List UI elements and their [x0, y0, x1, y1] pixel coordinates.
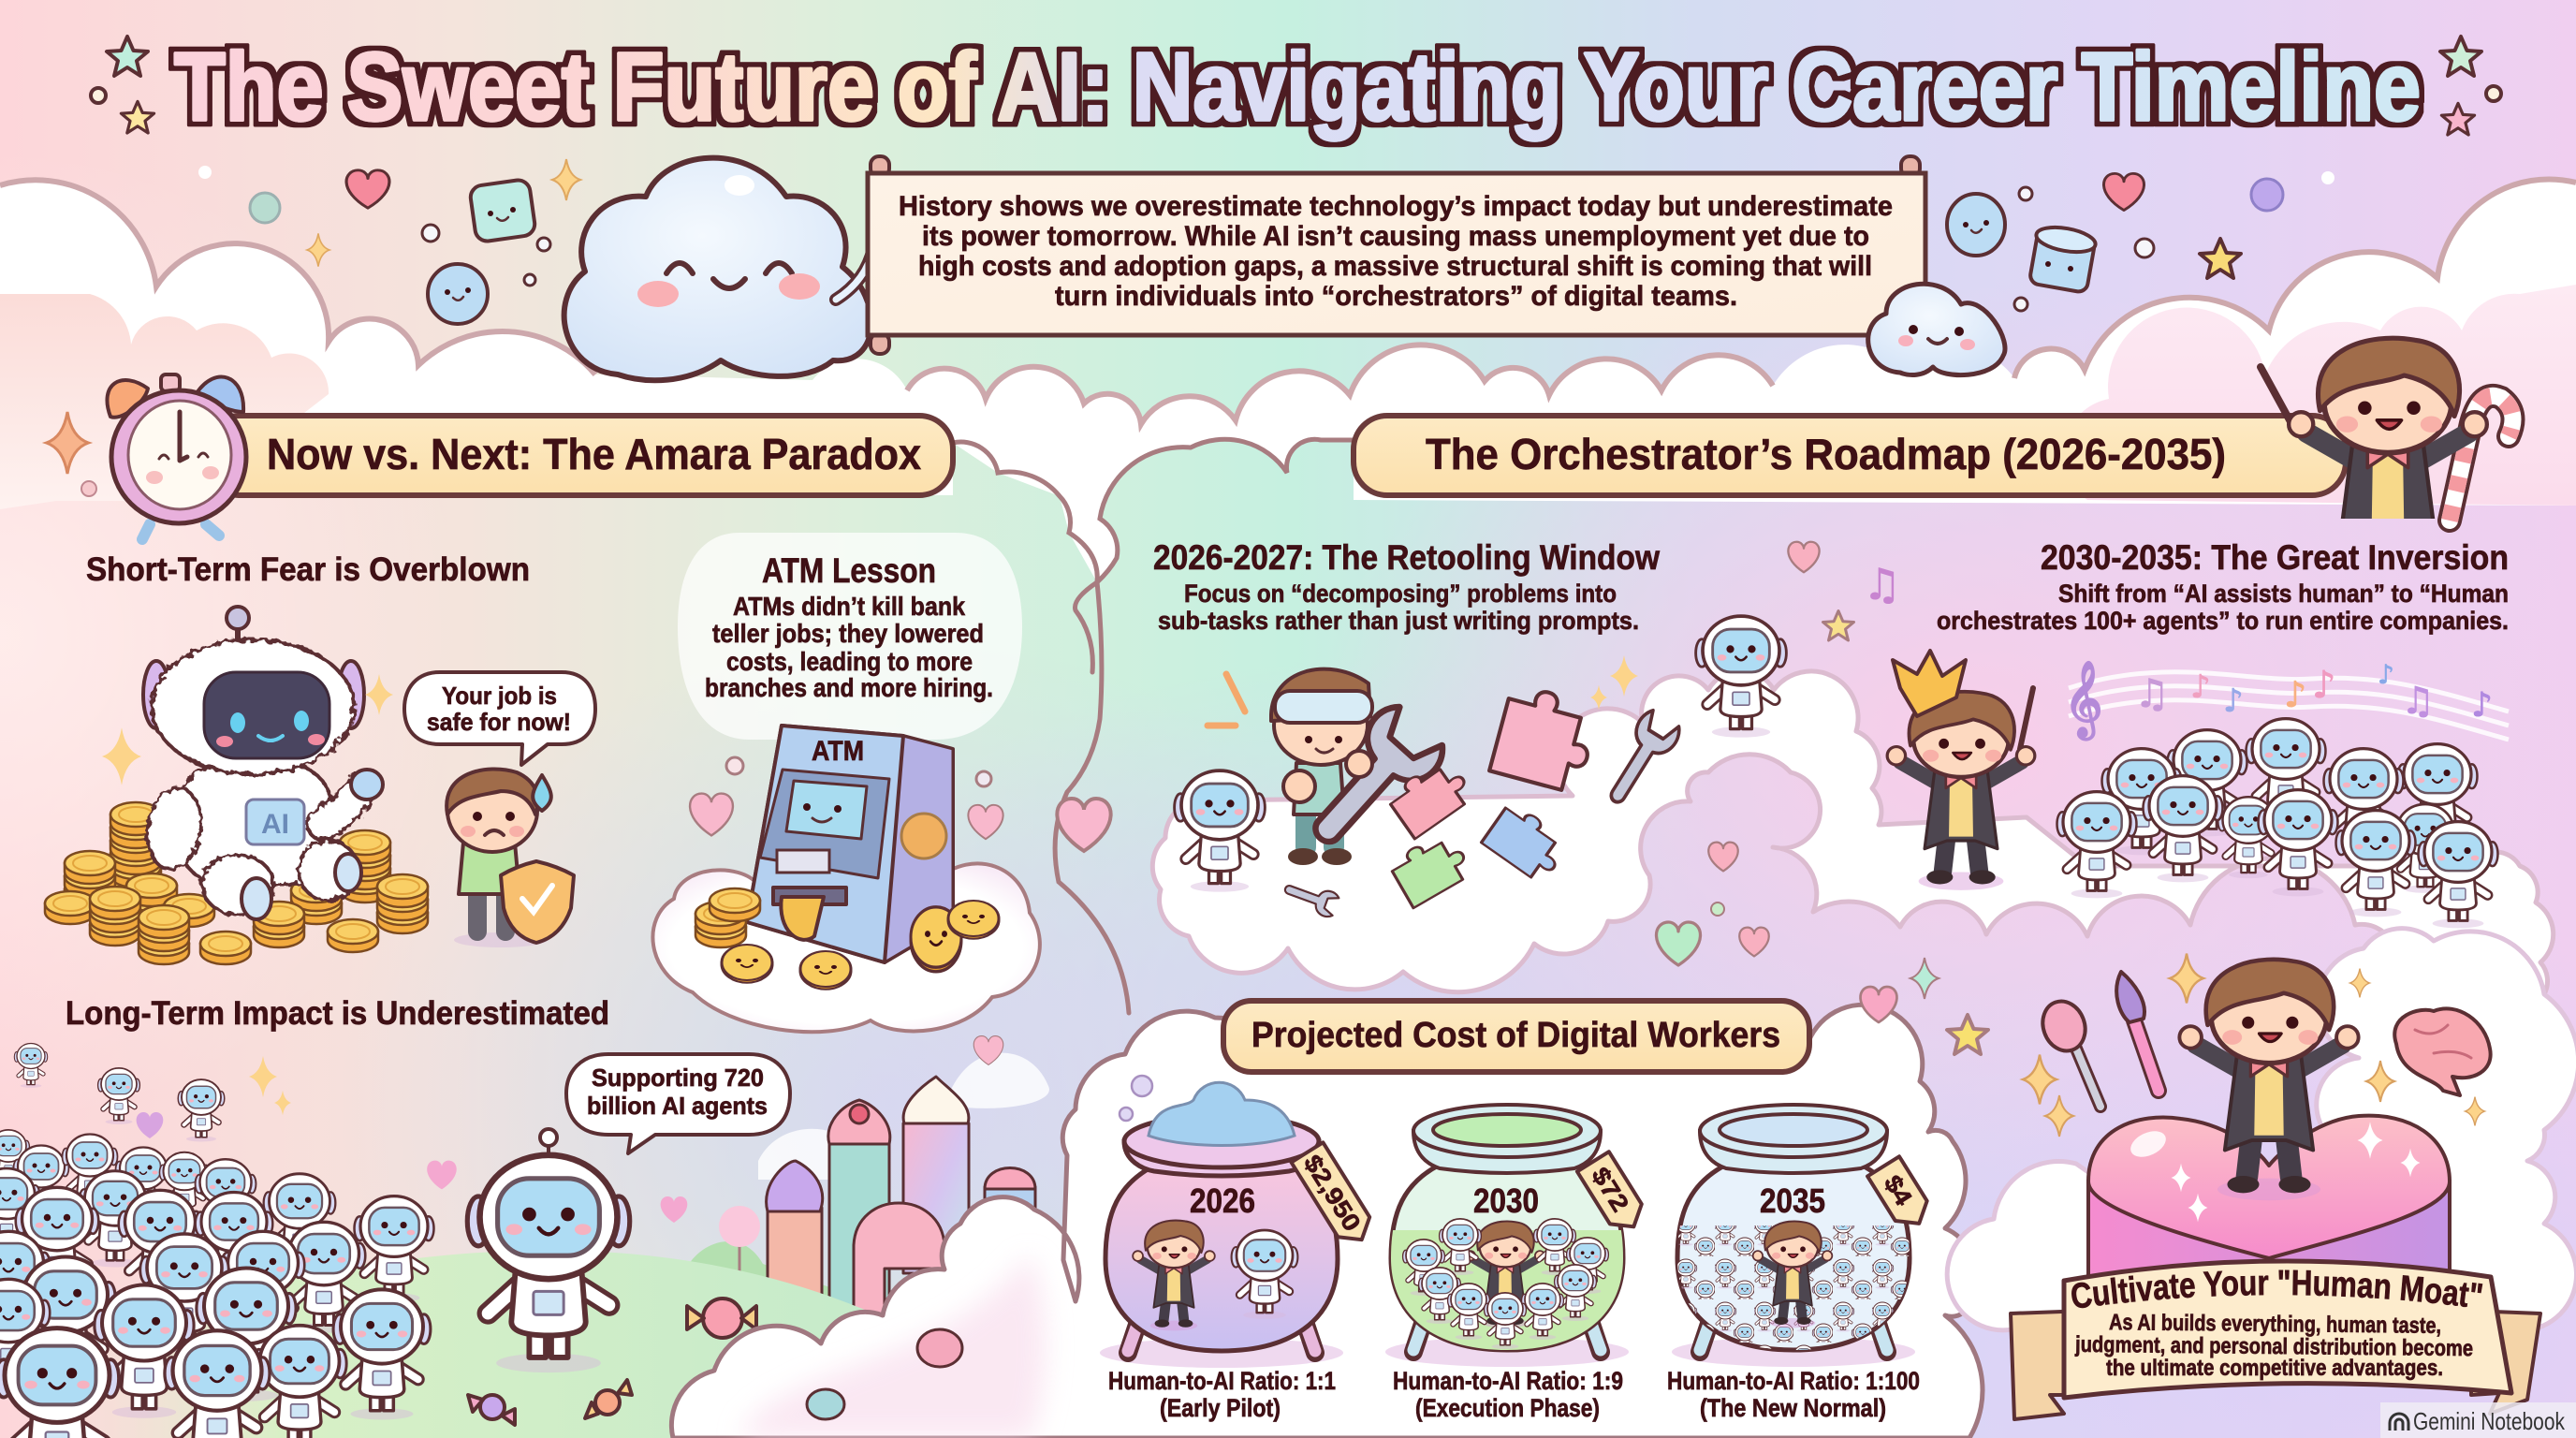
- heading: retooling: Focus on “decomposing” problems into: [1184, 580, 1617, 608]
- robot crowd: [0, 1130, 433, 1438]
- jar 2026: 2026: [1190, 1181, 1255, 1220]
- conductor with candy cane: [2257, 335, 2525, 533]
- banner: human moat: judgment, and personal distribution become: [2074, 1332, 2473, 1361]
- white cloud band: [0, 179, 2576, 582]
- intro scroll: [868, 156, 1925, 354]
- ATM lesson bubble: ATM Lesson: [762, 551, 936, 590]
- heading: retooling: [1153, 538, 1660, 635]
- heading: great inversion: Shift from “AI assists human” to “Human: [2058, 580, 2509, 608]
- title stars left: [91, 37, 154, 133]
- header: projected cost: Projected Cost of Digital Workers: [1251, 1016, 1780, 1055]
- section header: now vs next: [206, 416, 953, 495]
- jar 2030: 2030: [1473, 1181, 1539, 1220]
- section header: roadmap: [1354, 416, 2346, 495]
- human moat tools: [2023, 954, 2484, 1137]
- banner: human moat: Cultivate Your "Human Moat": [2071, 1269, 2482, 1309]
- price tag 2950: [1291, 1142, 1378, 1250]
- green hill: [0, 1251, 936, 1438]
- icon: brain: [2394, 1008, 2491, 1095]
- banner: human moat: the ultimate competitive advantages.: [2106, 1356, 2443, 1381]
- speech bubble: your job: Your job is: [442, 682, 557, 710]
- heart divider: [1057, 799, 1111, 851]
- price tag 4: $4: [1879, 1170, 1918, 1211]
- crowned conductor: [1887, 651, 2035, 890]
- candies: [468, 1299, 756, 1425]
- speech bubble: supporting agents: billion AI agents: [587, 1092, 768, 1120]
- jar 2026: [1100, 1076, 1343, 1368]
- cloud mascot: [564, 158, 873, 380]
- price tag 2950: $2,950: [1298, 1150, 1367, 1236]
- fuzzy AI robot: AI: [261, 809, 289, 840]
- small cloud right: [1868, 284, 2005, 375]
- section header: now vs next: Now vs. Next: The Amara Paradox: [267, 430, 921, 478]
- ATM cloud: [652, 863, 1040, 1032]
- music staff: ♪: [2223, 682, 2244, 720]
- puzzle pieces: [1385, 655, 1638, 908]
- intro scroll: turn individuals into “orchestrators” of digital teams.: [1055, 281, 1737, 312]
- speech bubble: your job: safe for now!: [427, 708, 571, 736]
- ratio labels: Human-to-AI Ratio: 1:9: [1393, 1367, 1623, 1395]
- smiling coins: [695, 888, 999, 990]
- jar 2035: [1672, 1105, 1915, 1367]
- heading: long term: Long-Term Impact is Underestimated: [66, 995, 609, 1032]
- ratio labels: (Early Pilot): [1160, 1394, 1281, 1422]
- wrenches: [1281, 708, 1684, 918]
- ratio labels: [1108, 1367, 1920, 1422]
- flying robots: [14, 1036, 1003, 1223]
- worried boy with shield: [446, 769, 574, 947]
- panel boundaries: [953, 439, 1354, 1013]
- header: projected cost: [1223, 1001, 1809, 1072]
- music staff: ♪: [2190, 668, 2211, 706]
- stage conductor: [2179, 960, 2359, 1200]
- price tag 72: $72: [1586, 1162, 1634, 1217]
- music staff: [2064, 659, 2509, 741]
- ATM lesson bubble: [678, 533, 1022, 740]
- heading: great inversion: [1937, 538, 2509, 635]
- music staff: ♪: [2284, 674, 2306, 715]
- candy town: [681, 1053, 1049, 1329]
- intro scroll: high costs and adoption gaps, a massive structural shift is coming that will: [918, 251, 1872, 282]
- intro scroll: History shows we overestimate technology’s impact today but underestimate: [899, 191, 1893, 222]
- music staff: 𝄞: [2064, 660, 2102, 741]
- heading: retooling: 2026-2027: The Retooling Window: [1153, 538, 1660, 577]
- heading: short term: Short-Term Fear is Overblown: [86, 551, 530, 588]
- ratio labels: Human-to-AI Ratio: 1:1: [1108, 1367, 1336, 1395]
- section header: roadmap: The Orchestrator’s Roadmap (2026-2035): [1426, 430, 2226, 478]
- ATM lesson bubble: teller jobs; they lowered: [712, 619, 984, 648]
- lead robot: [467, 1129, 630, 1372]
- robot orchestra: [2057, 719, 2497, 928]
- watermark: [2380, 1402, 2576, 1438]
- floating candies right: [1947, 171, 2334, 311]
- ratio labels: (The New Normal): [1700, 1394, 1886, 1422]
- speech bubble: supporting agents: [566, 1054, 790, 1153]
- ratio labels: Human-to-AI Ratio: 1:100: [1667, 1367, 1920, 1395]
- title stars right: [2440, 37, 2501, 135]
- music staff: ♫: [2134, 670, 2170, 716]
- speech bubble: supporting agents: Supporting 720: [592, 1064, 764, 1092]
- coin pile: [45, 802, 428, 964]
- floating candies left: [198, 159, 580, 324]
- banner: human moat: [2009, 1258, 2542, 1421]
- ATM machine: [690, 726, 1003, 962]
- ATM machine: ATM: [812, 736, 864, 767]
- floating hearts and stars: [1656, 542, 1988, 1054]
- price tag 4: [1867, 1156, 1935, 1234]
- intro scroll: its power tomorrow. While AI isn’t causing mass unemployment yet due to: [922, 221, 1869, 252]
- ATM lesson bubble: costs, leading to more: [726, 647, 973, 676]
- price tag 72: [1577, 1152, 1649, 1237]
- icon: alarm clock: [47, 374, 246, 539]
- music staff: ♪: [2312, 664, 2336, 707]
- floating hearts and stars: ♫: [1863, 559, 1901, 609]
- jar 2035: 2035: [1760, 1181, 1825, 1220]
- ATM lesson bubble: ATMs didn’t kill bank: [733, 592, 965, 621]
- soft pastel clouds: [0, 285, 2576, 509]
- music staff: ♪: [2378, 659, 2394, 690]
- music staff: ♫: [2401, 680, 2435, 723]
- heading: great inversion: 2030-2035: The Great Inversion: [2041, 538, 2509, 577]
- panel: projected cost cloud: [671, 1005, 1983, 1438]
- ratio labels: (Execution Phase): [1415, 1394, 1600, 1422]
- roadmap robots: [1175, 616, 1786, 892]
- heading: great inversion: orchestrates 100+ agents” to run entire companies.: [1937, 607, 2509, 635]
- ATM lesson bubble: branches and more hiring.: [705, 673, 993, 702]
- worker with goggles and wrench: [1208, 669, 1450, 865]
- fuzzy AI robot: [102, 607, 393, 919]
- roadmap cloud path: [1152, 670, 2554, 1011]
- heart pedestal: [2088, 1116, 2450, 1329]
- music staff: ♪: [2471, 686, 2493, 725]
- banner: human moat: As AI builds everything, human taste,: [2109, 1310, 2441, 1339]
- jar 2030: [1385, 1105, 1629, 1367]
- heart cloud: [1947, 929, 2576, 1330]
- heading: retooling: sub-tasks rather than just writing prompts.: [1158, 607, 1639, 635]
- speech bubble: your job: [404, 672, 595, 765]
